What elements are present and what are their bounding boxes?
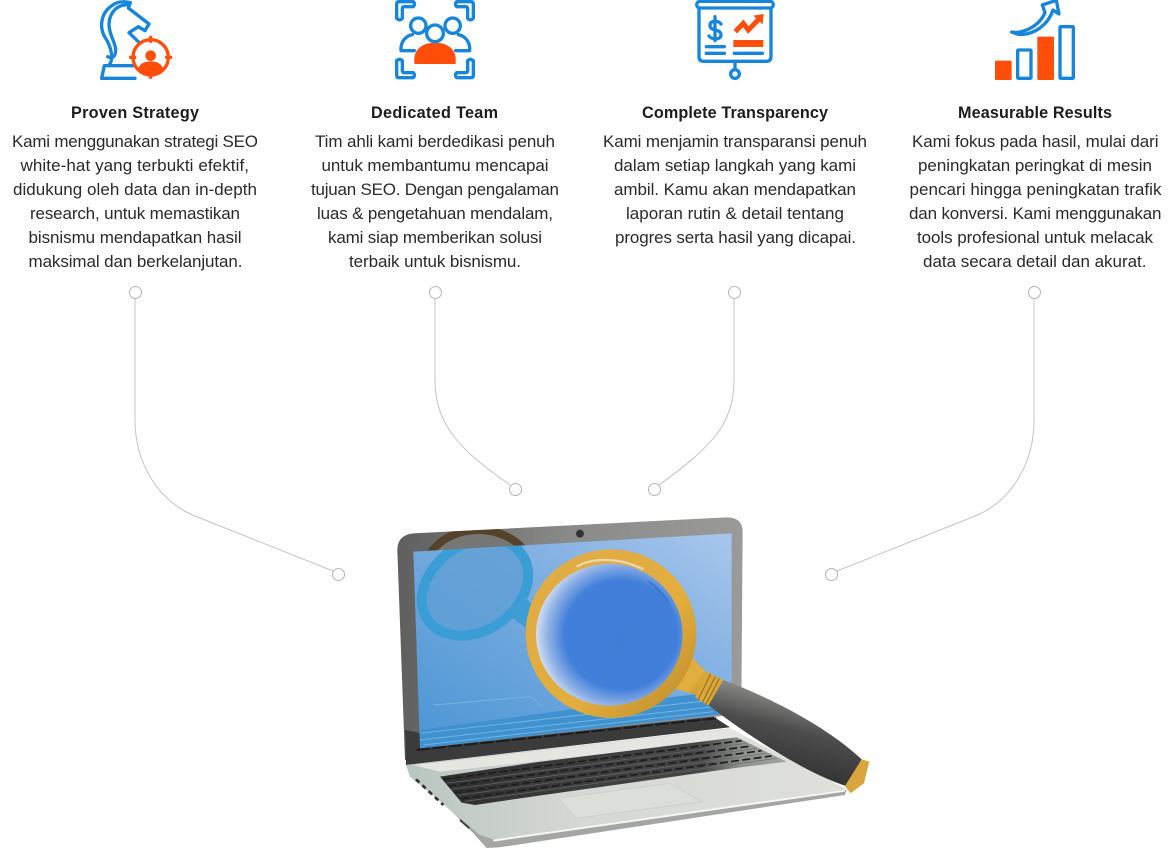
text block: Complete Transparency description: dalam setiap langkah yang kami xyxy=(614,156,856,175)
text block: Proven Strategy description: bisnismu mendapatkan hasil xyxy=(28,228,242,247)
heading: Dedicated Team: Dedicated Team xyxy=(371,104,498,122)
keyboard hinge strip xyxy=(405,717,730,765)
icon: presentation board xyxy=(697,1,773,78)
text block: Measurable Results description: tools profesional untuk melacak xyxy=(917,228,1154,247)
touchpad xyxy=(558,783,702,818)
magnifier collar xyxy=(695,672,723,706)
text block: Measurable Results description: Kami fokus pada hasil, mulai dari xyxy=(912,132,1158,151)
text block: Measurable Results description xyxy=(909,132,1162,271)
text block: Measurable Results description: peningkatan peringkat di mesin xyxy=(918,156,1152,175)
text block: Complete Transparency description xyxy=(603,132,867,247)
magnifying glass xyxy=(526,549,869,793)
laptop lid xyxy=(397,517,743,760)
text block: Measurable Results description: data secara detail dan akurat. xyxy=(923,252,1146,271)
heading: Measurable Results: Measurable Results xyxy=(958,104,1112,122)
laptop base xyxy=(406,728,847,848)
laptop screen xyxy=(403,519,732,750)
text block: Dedicated Team description: terbaik untuk bisnismu. xyxy=(349,252,521,271)
gold ring xyxy=(526,549,696,718)
text block: Dedicated Team description: untuk membantumu mencapai xyxy=(322,156,548,175)
text block: Proven Strategy description: Kami menggunakan strategi SEO xyxy=(12,132,258,151)
handle end cap xyxy=(845,759,869,793)
text block: Proven Strategy description: research, untuk memastikan xyxy=(30,204,240,223)
magnifier neck xyxy=(673,657,708,695)
magnifier handle xyxy=(708,680,862,787)
illustration: laptop with magnifying glass xyxy=(397,517,869,848)
lens xyxy=(536,564,683,706)
text block: Complete Transparency description: Kami menjamin transparansi penuh xyxy=(603,132,867,151)
text block: Dedicated Team description: luas & pengetahuan mendalam, xyxy=(317,204,553,223)
text block: Proven Strategy description: didukung oleh data dan in-depth xyxy=(13,180,257,199)
heading: Proven Strategy: Proven Strategy xyxy=(71,104,199,122)
text block: Dedicated Team description: Tim ahli kami berdedikasi penuh xyxy=(315,132,555,151)
text block: Dedicated Team description: kami siap memberikan solusi xyxy=(328,228,542,247)
text block: Complete Transparency description: laporan rutin & detail tentang xyxy=(626,204,844,223)
icon: chess knight with target xyxy=(102,2,171,78)
text block: Proven Strategy description: maksimal dan berkelanjutan. xyxy=(28,252,242,271)
text block: Proven Strategy description: white-hat yang terbukti efektif, xyxy=(20,156,249,175)
text block: Dedicated Team description: tujuan SEO. Dengan pengalaman xyxy=(311,180,559,199)
keyboard xyxy=(437,733,790,807)
text block: Complete Transparency description: progres serta hasil yang dicapai. xyxy=(615,228,856,247)
icon: growth bars with arrow xyxy=(995,0,1073,80)
text block: Dedicated Team description xyxy=(311,132,559,271)
text block: Measurable Results description: dan konversi. Kami menggunakan xyxy=(909,204,1162,223)
icon: team in focus frame xyxy=(397,2,473,78)
text block: Complete Transparency description: ambil. Kamu akan mendapatkan xyxy=(614,180,856,199)
heading: Complete Transparency: Complete Transparency xyxy=(642,104,828,122)
text block: Measurable Results description: pencari hingga peningkatan trafik xyxy=(910,180,1162,199)
text block: Proven Strategy description xyxy=(12,132,258,271)
connector lines xyxy=(130,286,1040,580)
